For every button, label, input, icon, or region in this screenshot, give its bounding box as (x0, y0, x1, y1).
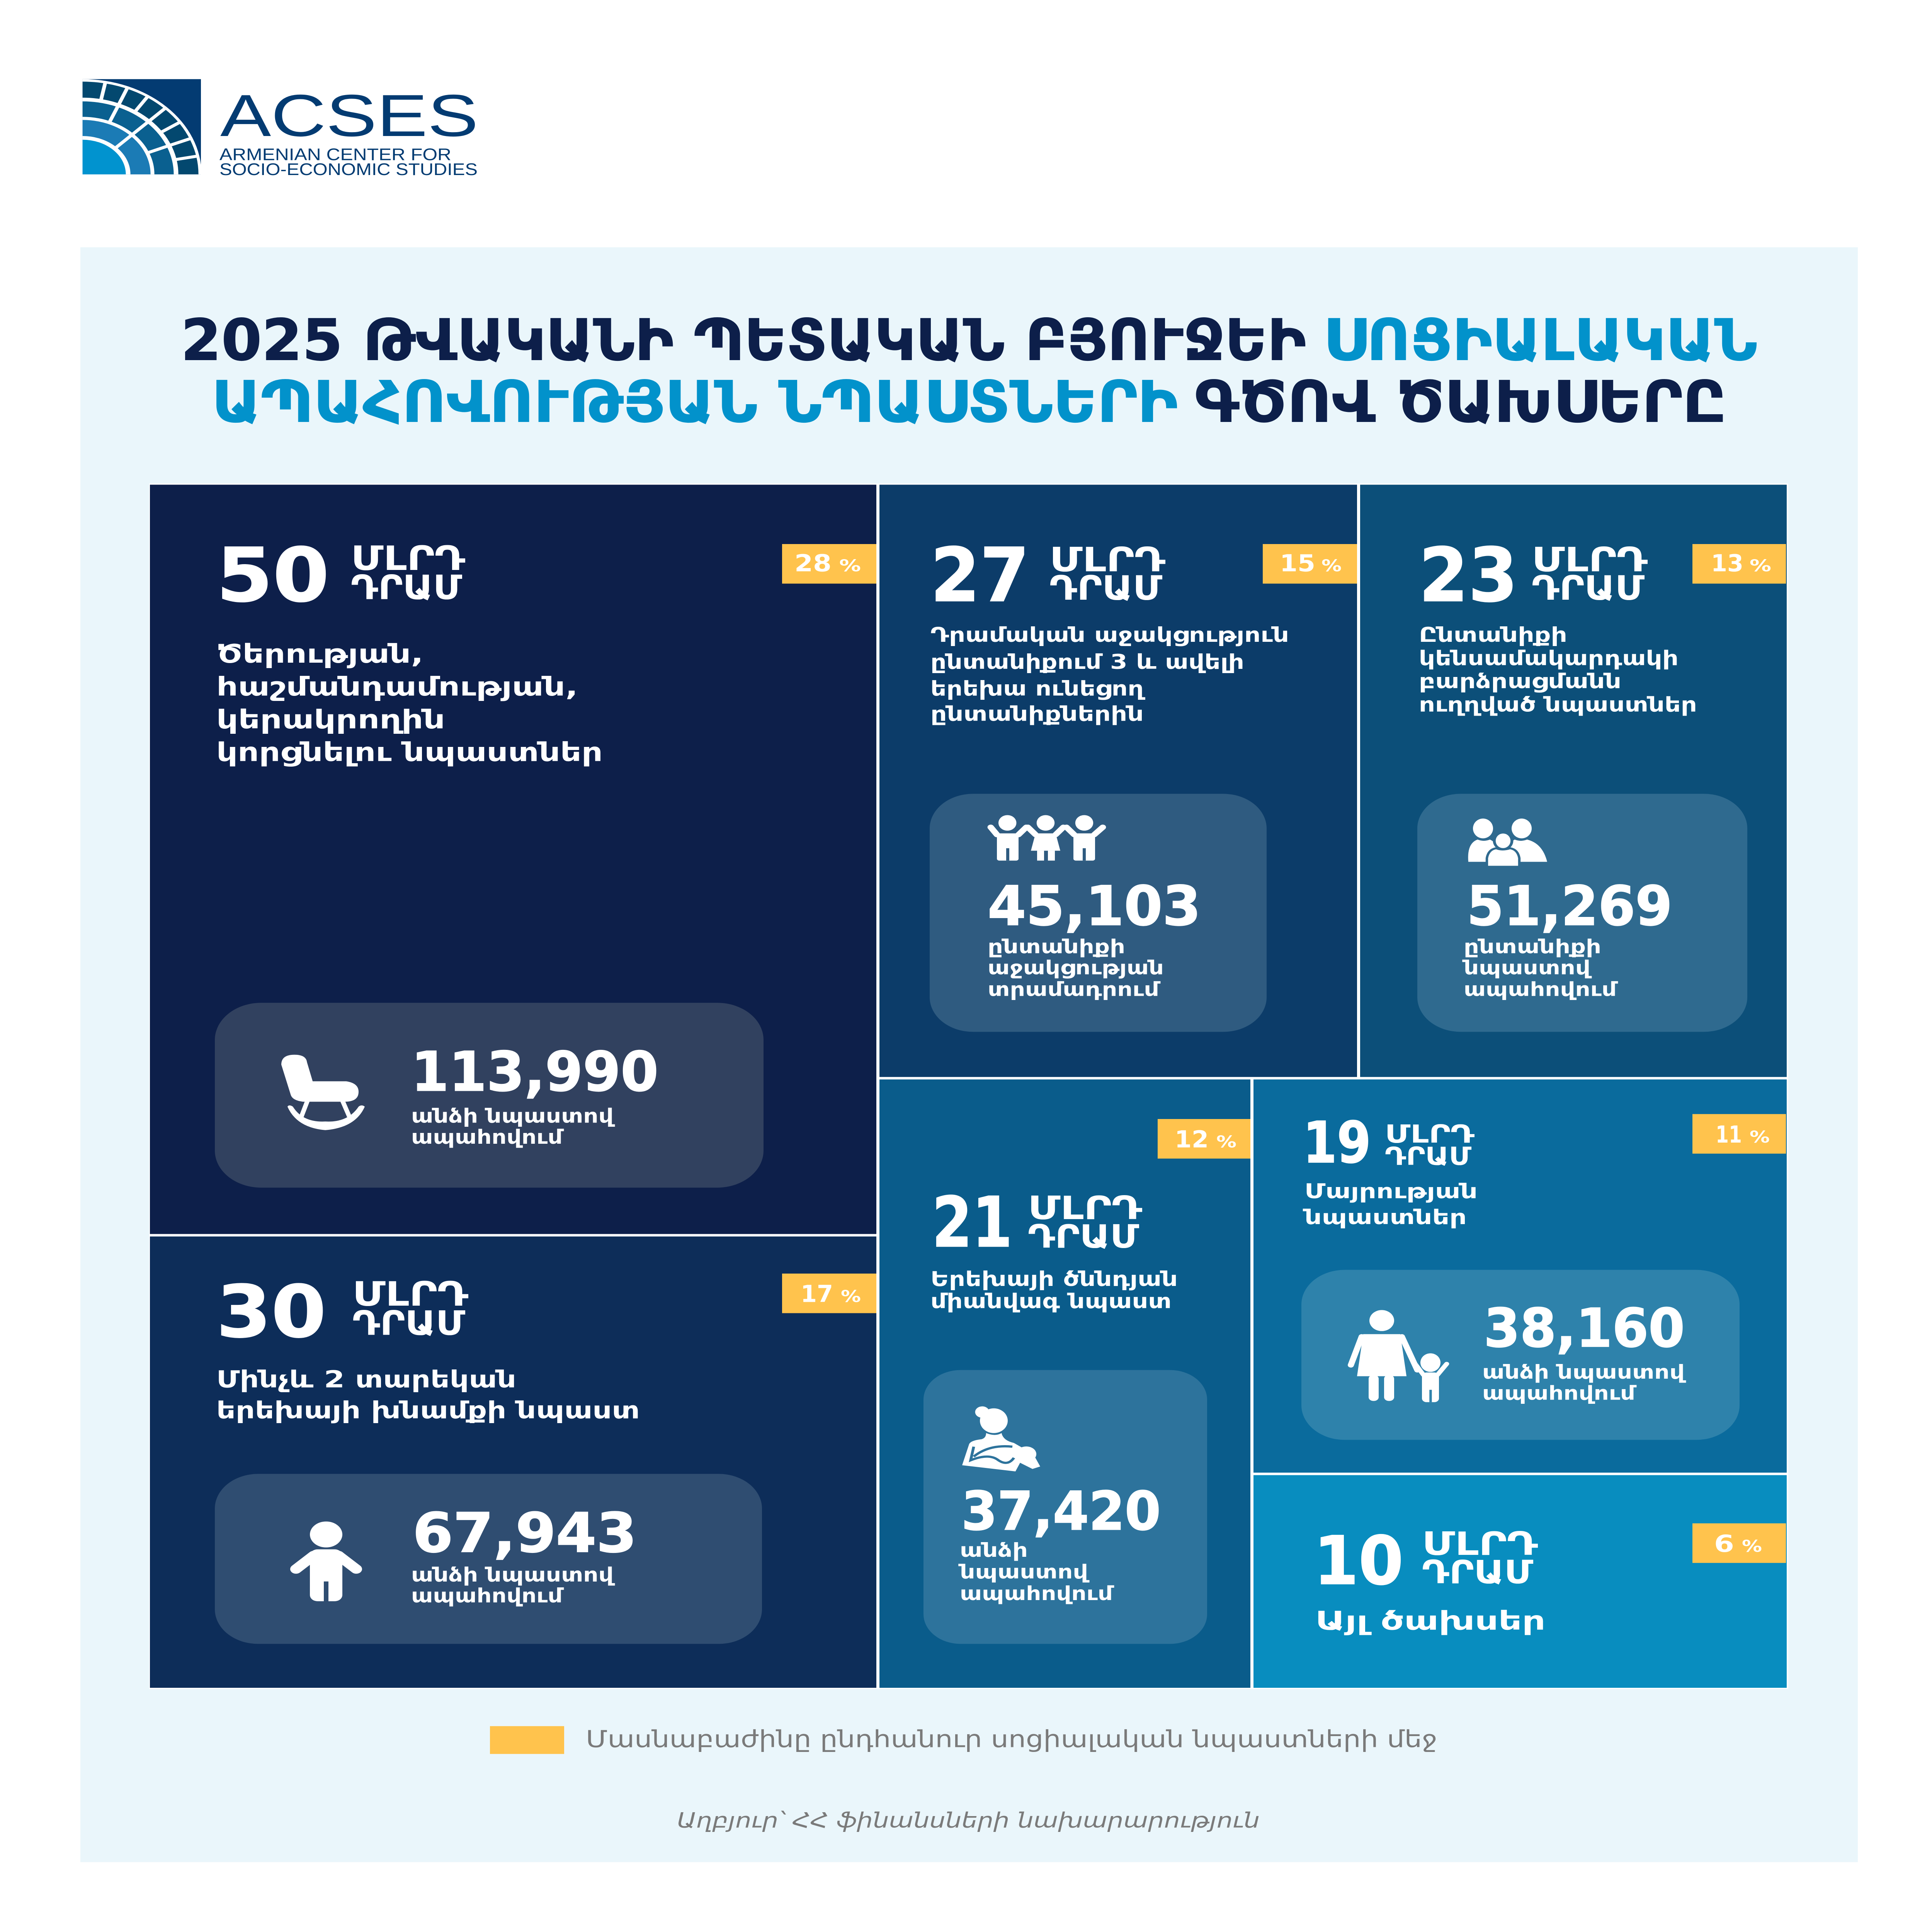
description: նպաստներ (1303, 1206, 1467, 1229)
badge 6%: % (1742, 1537, 1762, 1556)
description (1419, 623, 1697, 717)
stat card 45,103: աջակցության (988, 957, 1164, 979)
amount 50 (216, 532, 466, 619)
title: ԱՊԱՀՈՎՈՒԹՅԱՆ ՆՊԱՍՏՆԵՐԻ (212, 369, 1178, 435)
source note: Աղբյուր՝ ՀՀ ֆինանսների նախարարություն (677, 1808, 1260, 1833)
description: ընտանիքներին (930, 702, 1144, 726)
title (181, 307, 1757, 435)
stat card 113,990 (215, 1003, 764, 1188)
stat number: 67,943 (413, 1501, 637, 1565)
icon: family (1468, 818, 1547, 867)
logo wordmark: ACSES (220, 82, 478, 149)
amount 50: 50 (216, 532, 329, 619)
amount 21: 21 (932, 1182, 1012, 1263)
badge 15% (1263, 544, 1357, 583)
stat label: անձի (960, 1539, 1028, 1561)
legend: Մասնաբաժինը ընդհանուր սոցիալական նպաստների մեջ (586, 1726, 1437, 1753)
stat label: ընտանիքի (1464, 936, 1601, 958)
stat card 113,990: ապահովում (411, 1125, 564, 1148)
stat card 51,269: նպաստով (1462, 957, 1592, 979)
amount 19: ԴՐԱՄ (1385, 1142, 1472, 1171)
title: ՍՈՑԻԱԼԱԿԱՆ (1323, 307, 1757, 374)
amount 21: ԴՐԱՄ (1028, 1218, 1139, 1255)
title: 2025 ԹՎԱԿԱՆԻ ՊԵՏԱԿԱՆ ԲՅՈՒՋԵԻ (181, 307, 1306, 374)
description: կորցնելու նպաստներ (216, 737, 603, 767)
badge 15%: 15 (1280, 550, 1315, 577)
amount 21 (932, 1182, 1142, 1263)
amount 50: ՄԼՐԴ (351, 539, 466, 578)
icon: mother with baby (962, 1406, 1040, 1471)
description (930, 623, 1289, 726)
stat card 37,420 (923, 1370, 1207, 1644)
stat card 38,160: ապահովում (1482, 1382, 1637, 1405)
amount 10: ՄԼՐԴ (1422, 1526, 1538, 1563)
amount 50: ԴՐԱՄ (351, 568, 463, 607)
panel: 50 billion (150, 485, 876, 1234)
amount 19: 19 (1303, 1110, 1371, 1176)
badge 13% (1692, 544, 1786, 583)
treemap backing (149, 483, 1788, 1689)
stat card 37,420: ապահովում (960, 1583, 1114, 1605)
amount 30: 30 (216, 1270, 326, 1354)
logo mark (83, 79, 202, 174)
description: կենսամակարդակի (1419, 647, 1679, 670)
icon: rocking chair (281, 1055, 365, 1130)
stat card 45,103: տրամադրում (988, 979, 1161, 1001)
stat card 51,269 (1417, 794, 1747, 1032)
description: ուղղված նպաստներ (1419, 693, 1697, 717)
badge 28%: 28 (794, 550, 832, 577)
stat card 38,160 (1301, 1270, 1740, 1440)
stat number: 38,160 (1484, 1297, 1685, 1359)
panel: 27 billion (879, 485, 1357, 1077)
description: Ծերության, (216, 638, 423, 669)
amount 27 (930, 532, 1166, 619)
stat card 67,943 (215, 1474, 762, 1644)
icon: child (296, 1522, 356, 1602)
logo subtitle line 2: SOCIO-ECONOMIC STUDIES (219, 160, 478, 179)
badge 17%: % (841, 1287, 861, 1306)
description: բարձրացմանն (1419, 670, 1621, 693)
panel: 21 billion (879, 1080, 1250, 1688)
badge 28%: % (839, 556, 861, 575)
stat card 45,103 (930, 794, 1267, 1032)
description (216, 1366, 640, 1424)
panel: 19 billion (1253, 1080, 1787, 1473)
logo subtitle line 1: ARMENIAN CENTER FOR (219, 145, 451, 164)
stat number: 113,990 (411, 1040, 658, 1104)
description: երեխայի խնամքի նպաստ (216, 1397, 640, 1424)
badge 28% (782, 544, 876, 583)
description (930, 1267, 1178, 1313)
description: երեխա ունեցող (930, 677, 1146, 701)
amount 10: ԴՐԱՄ (1422, 1554, 1534, 1591)
description: ընտանիքում 3 և ավելի (930, 650, 1244, 674)
badge 17% (782, 1274, 876, 1313)
description: Մինչև 2 տարեկան (216, 1366, 516, 1393)
title: ԳԾՈՎ ԾԱԽՍԵՐԸ (1195, 369, 1726, 435)
badge 12%: 12 (1175, 1126, 1209, 1153)
panel: 23 billion (1360, 485, 1787, 1077)
stat label: ընտանիքի (988, 936, 1125, 958)
amount 27: ՄԼՐԴ (1049, 541, 1166, 580)
description (1303, 1180, 1478, 1229)
main panel background (80, 247, 1858, 1862)
description: Մայրության (1304, 1180, 1478, 1203)
badge 11%: 11 (1716, 1121, 1742, 1148)
stat card 67,943: ապահովում (411, 1584, 564, 1607)
amount 10 (1314, 1522, 1538, 1600)
description: կերակրողին (216, 704, 445, 735)
amount 27: 27 (930, 532, 1029, 619)
amount 27: ԴՐԱՄ (1049, 569, 1163, 608)
stat label: անձի նպաստով (1482, 1361, 1686, 1383)
amount 30 (216, 1270, 469, 1354)
badge 6% (1692, 1523, 1786, 1563)
badge 13%: % (1750, 556, 1771, 575)
amount 23: 23 (1419, 532, 1518, 619)
amount 10: 10 (1314, 1522, 1403, 1600)
amount 30: ԴՐԱՄ (352, 1304, 466, 1343)
panel: 30 billion (150, 1236, 876, 1688)
panel: 10 billion (1253, 1475, 1787, 1688)
logo: ACSES (83, 79, 478, 179)
amount 23: ՄԼՐԴ (1532, 541, 1648, 580)
description: Երեխայի ծննդյան (930, 1267, 1178, 1291)
badge 17%: 17 (801, 1281, 833, 1308)
description: միանվագ նպաստ (930, 1290, 1172, 1313)
badge 12% (1158, 1119, 1250, 1158)
description: Դրամական աջակցություն (930, 623, 1289, 647)
stat label: անձի նպաստով (411, 1104, 615, 1128)
badge 6%: 6 (1714, 1530, 1734, 1558)
badge 11%: % (1750, 1128, 1770, 1146)
description: հաշմանդամության, (216, 671, 578, 702)
amount 19 (1303, 1110, 1475, 1176)
stat card 51,269: ապահովում (1464, 979, 1618, 1001)
stat card 37,420: նպաստով (958, 1561, 1090, 1583)
amount 23: ԴՐԱՄ (1532, 569, 1645, 608)
badge 12%: % (1216, 1133, 1236, 1151)
amount 21: ՄԼՐԴ (1028, 1190, 1142, 1227)
description: Ընտանիքի (1419, 623, 1567, 647)
stat number: 45,103 (988, 874, 1201, 938)
badge 11% (1692, 1114, 1786, 1154)
badge 15%: % (1321, 556, 1342, 575)
stat label: անձի նպաստով (411, 1563, 615, 1586)
stat number: 37,420 (961, 1480, 1161, 1542)
amount 30: ՄԼՐԴ (352, 1275, 469, 1314)
stat number: 51,269 (1467, 874, 1672, 938)
icon: mother and child (1351, 1310, 1447, 1402)
amount 23 (1419, 532, 1648, 619)
badge 13%: 13 (1711, 550, 1743, 577)
description (216, 638, 603, 767)
amount 19: ՄԼՐԴ (1385, 1120, 1475, 1149)
description: Այլ ծախսեր (1315, 1605, 1546, 1636)
icon: three children (991, 815, 1103, 861)
